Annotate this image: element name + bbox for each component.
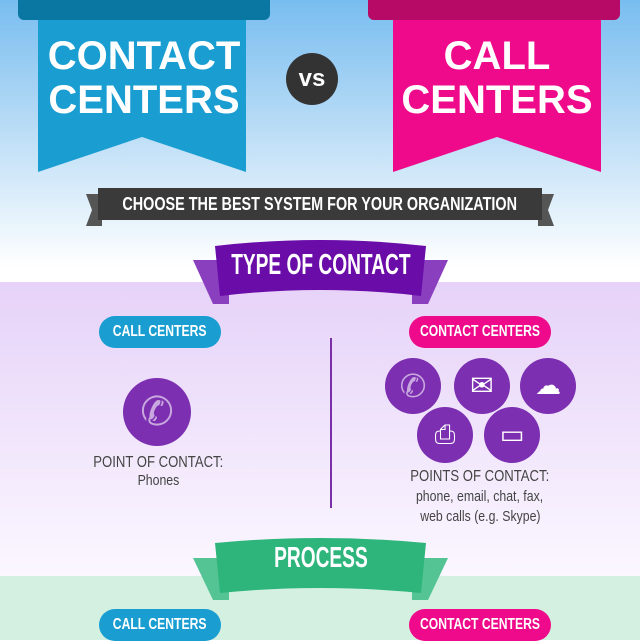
subtitle ribbon: CHOOSE THE BEST SYSTEM FOR YOUR ORGANIZATION: [123, 194, 517, 214]
icon: fax: ⎙: [435, 420, 455, 450]
text: points of contact: phone, email, chat, fax,: [416, 488, 544, 505]
pill: contact centers: CONTACT CENTERS: [420, 323, 540, 340]
ribbon: process: PROCESS: [274, 542, 367, 574]
banner: contact centers: [18, 0, 270, 172]
banner: call centers: [368, 0, 620, 172]
icon: phone: ✆: [400, 367, 426, 405]
icon: phone: [385, 358, 441, 414]
text: point of contact: [93, 454, 223, 489]
subtitle ribbon: [86, 188, 554, 226]
icon: fax: [417, 407, 473, 463]
banner: contact centers: CONTACT: [48, 34, 240, 78]
text: point of contact: Phones: [137, 472, 179, 489]
pill: call centers (process): CALL CENTERS: [113, 616, 207, 633]
icon: email globe: [454, 358, 510, 414]
pill: call centers: [99, 316, 221, 348]
background: top sky: [0, 0, 640, 282]
banner: call centers: CENTERS: [401, 78, 593, 122]
pill: contact centers (process): [409, 609, 551, 641]
icon: email globe: ✉: [470, 369, 494, 402]
vs badge: [286, 53, 338, 105]
background: process section: [0, 576, 640, 640]
vs badge: vs: [299, 65, 325, 92]
icons: contact channels: [385, 358, 576, 463]
icon: web call: [484, 407, 540, 463]
icon: phone: [123, 378, 191, 446]
pill: contact centers: [409, 316, 551, 348]
icon: chat: ☁: [535, 371, 561, 401]
banner: contact centers: CENTERS: [48, 78, 240, 122]
ribbon: type of contact: TYPE OF CONTACT: [231, 249, 410, 281]
text: point of contact: POINT OF CONTACT:: [93, 454, 223, 471]
text: points of contact: web calls (e.g. Skype): [420, 508, 540, 525]
pill: contact centers (process): CONTACT CENTERS: [420, 616, 540, 633]
background: type of contact section: [0, 282, 640, 576]
pill: call centers: CALL CENTERS: [113, 323, 207, 340]
pill: call centers (process): [99, 609, 221, 641]
text: points of contact: POINTS OF CONTACT:: [411, 468, 549, 485]
ribbon: process: [193, 538, 448, 600]
banner: call centers: CALL: [444, 34, 550, 78]
icon: web call: ▭: [500, 420, 524, 450]
icon: phone: ✆: [140, 389, 174, 435]
ribbon: type of contact: [193, 240, 448, 304]
icon: chat: [520, 358, 576, 414]
divider: [330, 338, 332, 508]
text: points of contact: [411, 468, 549, 525]
